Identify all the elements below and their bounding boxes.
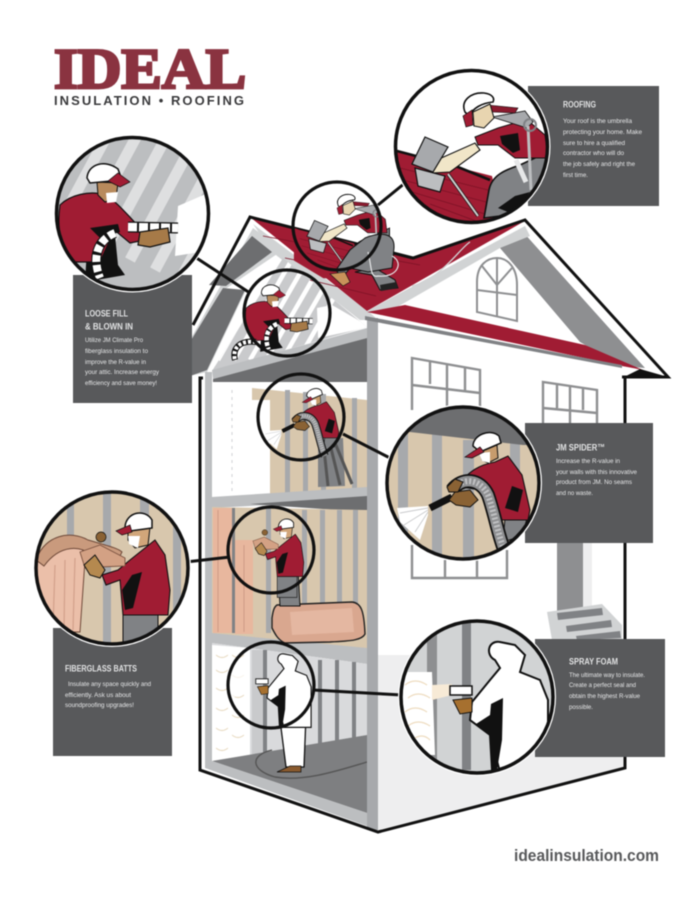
floor <box>212 735 367 813</box>
heading: roofing: ROOFING <box>563 100 596 110</box>
attic floor <box>212 328 367 379</box>
attic underside <box>213 338 367 401</box>
panel: roofing <box>528 86 659 206</box>
text: loose fill body <box>85 337 160 387</box>
text: spray foam body: possible. <box>569 704 593 711</box>
panel: spray foam <box>535 639 665 757</box>
attic eave trim <box>253 224 378 320</box>
text: fiberglass body <box>65 681 152 709</box>
text: JM Spider body: your walls with this innovative <box>556 469 638 476</box>
text: spray foam body: The ultimate way to insulate. <box>569 672 645 679</box>
roof ridge line <box>193 217 668 377</box>
text: JM Spider body <box>556 458 638 497</box>
text: loose fill body: fiberglass insulation to <box>85 348 149 355</box>
detail: roofer on roof <box>293 182 398 291</box>
text: loose fill body: improve the R-value in <box>85 359 147 366</box>
text: spray foam body <box>569 672 645 711</box>
heading: JM Spider: JM SPIDER™ <box>556 442 605 454</box>
floor band lower <box>212 633 367 664</box>
heading: spray foam: SPRAY FOAM <box>569 656 618 668</box>
text: roofing body: sure to hire a qualified <box>563 140 626 147</box>
text: JM Spider body: Increase the R-value in <box>556 458 621 465</box>
text: loose fill body: efficiency and save money! <box>85 380 157 387</box>
room: spider <box>212 382 367 499</box>
house <box>190 217 668 832</box>
room: fiberglass <box>212 507 367 650</box>
heading: fiberglass batts: FIBERGLASS BATTS <box>65 664 137 674</box>
callout circle: fiberglass <box>30 488 195 653</box>
text: roofing body: Your roof is the umbrella <box>563 118 633 125</box>
text: roofing body <box>563 118 643 179</box>
roof light trim <box>367 226 530 314</box>
text: roofing body: first time. <box>563 172 588 179</box>
connector lines <box>186 183 405 695</box>
text: roofing body: contractor who will do <box>563 150 625 157</box>
callout circle: spray foam <box>395 615 560 780</box>
heading: loose fill: & BLOWN IN <box>85 322 133 332</box>
text: roofing body: protecting your home. Make <box>563 129 643 136</box>
logo <box>54 38 246 108</box>
text: spray foam body: obtain the highest R-value <box>569 693 641 700</box>
text: JM Spider body: product from JM. No seams <box>556 479 632 486</box>
logo wordmark: IDEAL <box>54 38 246 101</box>
room: spray foam <box>212 643 367 762</box>
panel: fiberglass batts <box>53 628 172 756</box>
callout circle: JM Spider <box>384 400 545 565</box>
panel: loose fill <box>73 275 192 403</box>
text: fiberglass body: Insulate any space quickly and <box>68 681 152 688</box>
text: loose fill body: your attic. Increase energy <box>85 369 160 376</box>
porch column <box>547 543 622 640</box>
house outline <box>200 377 625 832</box>
text: JM Spider body: and no waste. <box>556 490 593 497</box>
callout circle: loose fill <box>54 134 212 294</box>
panel: JM Spider <box>525 423 653 543</box>
website: idealinsulation.com <box>514 847 659 865</box>
gable trim grey <box>500 232 645 368</box>
window: upper floor right <box>543 382 597 425</box>
detail: spray foam worker <box>228 642 314 772</box>
callout circle: roofing <box>390 68 552 235</box>
detail: fiberglass worker <box>228 507 314 606</box>
lower wall shading <box>378 655 625 830</box>
front gable <box>388 230 622 366</box>
text: roofing body: the job safely and right the <box>563 161 636 168</box>
window: upper floor left <box>412 358 507 578</box>
gable window <box>477 258 517 321</box>
detail: spider worker in wall <box>258 374 352 487</box>
floor hose <box>256 750 367 778</box>
logo tagline: INSULATION • ROOFING <box>54 93 244 108</box>
right wall <box>378 320 625 832</box>
attic <box>212 259 359 370</box>
lower red roof strip <box>365 305 668 378</box>
text: fiberglass body: soundproofing upgrades! <box>65 702 134 709</box>
text: loose fill body: Utilize JM Climate Pro <box>85 337 144 344</box>
main red roof <box>250 217 523 311</box>
floor band <box>212 487 367 508</box>
batt of insulation <box>272 602 365 643</box>
text: spray foam body: Create a perfect seal and <box>569 682 637 689</box>
heading: loose fill <box>85 308 133 332</box>
columns <box>367 318 378 830</box>
left roof side <box>190 217 283 376</box>
text: fiberglass body: efficiently. Ask us about <box>65 692 131 699</box>
heading: loose fill: LOOSE FILL <box>85 308 128 320</box>
detail: loose fill worker in attic <box>234 270 330 360</box>
safety rope <box>412 242 470 286</box>
base trim <box>205 761 378 830</box>
